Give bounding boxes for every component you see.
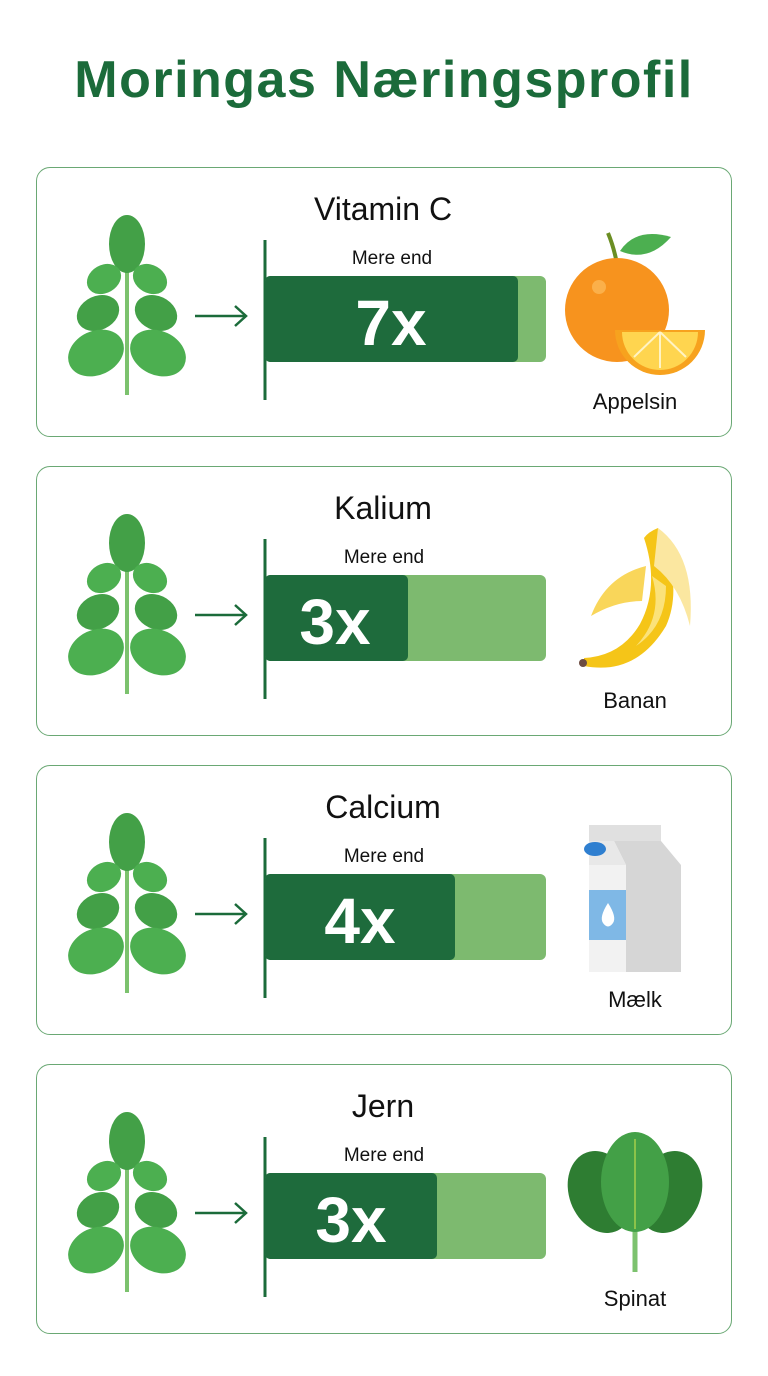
bar chart: Mere end <box>343 546 424 568</box>
arrow <box>194 306 246 326</box>
bar chart: Mere end <box>343 846 424 866</box>
arrow <box>194 604 246 624</box>
panel: calcium <box>36 765 732 1035</box>
panel: kalium <box>36 466 732 736</box>
icon: moringa leaf <box>60 214 193 394</box>
bar chart <box>264 1136 546 1296</box>
bar chart <box>264 240 546 400</box>
heading: Calcium <box>325 788 440 824</box>
icon: milk carton <box>584 824 680 972</box>
title: Moringas Næringsprofil <box>74 51 694 109</box>
label: Spinat <box>603 1286 666 1310</box>
bar chart: 3x <box>299 586 370 658</box>
icon: banana <box>578 528 690 667</box>
panel: vitamin C <box>36 167 732 437</box>
bar chart <box>264 538 546 698</box>
panel: jern <box>36 1064 732 1334</box>
bar chart: 3x <box>315 1184 386 1256</box>
heading: Kalium <box>334 490 431 526</box>
label: Mælk <box>608 986 662 1012</box>
bar chart <box>264 838 546 998</box>
icon: moringa leaf <box>60 812 193 992</box>
icon: spinach <box>556 1132 713 1272</box>
bar chart: 4x <box>324 884 396 956</box>
bar chart: 7x <box>355 286 426 358</box>
icon: orange <box>564 232 704 374</box>
label: Banan <box>603 688 666 712</box>
arrow <box>194 904 246 924</box>
bar chart: Mere end <box>351 248 432 268</box>
heading: Jern <box>351 1088 414 1124</box>
label: Appelsin <box>592 388 677 414</box>
arrow <box>194 1202 246 1222</box>
heading: Vitamin C <box>313 190 452 226</box>
icon: moringa leaf <box>60 1112 193 1292</box>
bar chart: Mere end <box>343 1144 424 1166</box>
icon: moringa leaf <box>60 514 193 694</box>
